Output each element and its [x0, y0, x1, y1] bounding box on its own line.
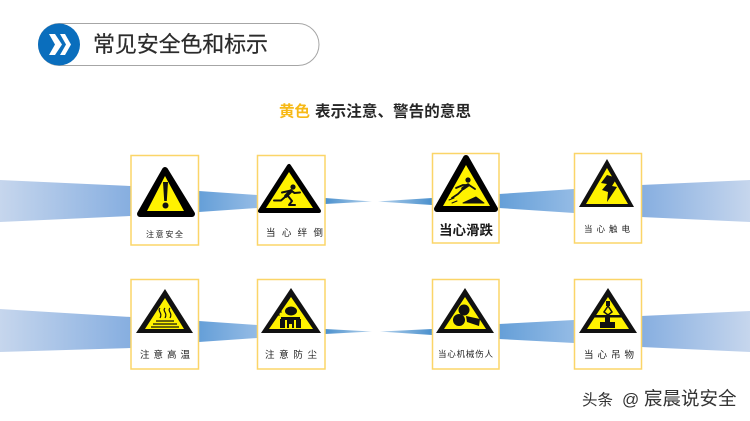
sign: 当心吊物: [574, 280, 642, 369]
subtitle: 表示注意、警告的意思: [315, 102, 471, 120]
icon: rollers and hand: [453, 304, 480, 326]
label: 当心吊物: [584, 349, 634, 361]
band: row 2 left: [0, 309, 372, 352]
icon: exclamation mark: [163, 182, 169, 208]
band: row 2 right: [380, 311, 750, 352]
label: 当心滑跌: [439, 222, 494, 238]
icon: dust and person: [278, 306, 301, 328]
label: 当心机械伤人: [438, 349, 493, 359]
sign: 注意安全: [131, 156, 198, 245]
subtitle: 黄色: [279, 102, 310, 120]
title: 常见安全色和标示: [93, 32, 268, 57]
icon: blue chevron circle: [38, 24, 80, 66]
icon: hoisted load: [594, 301, 622, 328]
label: 注意防尘: [265, 349, 317, 361]
watermark: 宸晨说安全: [644, 388, 737, 409]
watermark: @: [622, 390, 639, 409]
header pill: [38, 24, 319, 66]
label: 当心触电: [584, 224, 630, 234]
icon: running figure tripping: [274, 184, 300, 205]
label: 注意安全: [146, 229, 183, 239]
icon: lightning bolt: [601, 175, 617, 202]
label: 注意高温: [140, 349, 190, 361]
icon: heat waves: [151, 308, 179, 327]
sign: 当心滑跌: [432, 154, 499, 243]
sign: 注意高温: [131, 280, 198, 369]
watermark: [582, 388, 737, 409]
band: row 1 left: [0, 180, 372, 222]
icon: slipping figure: [449, 177, 484, 203]
sign: 注意防尘: [258, 280, 325, 369]
label: 当心绊倒: [266, 227, 323, 239]
band: row 1 right: [378, 180, 750, 222]
sign: 当心触电: [574, 154, 642, 243]
watermark: 头条: [582, 391, 613, 409]
sign: 当心机械伤人: [432, 280, 499, 369]
sign: 当心绊倒: [258, 156, 325, 245]
